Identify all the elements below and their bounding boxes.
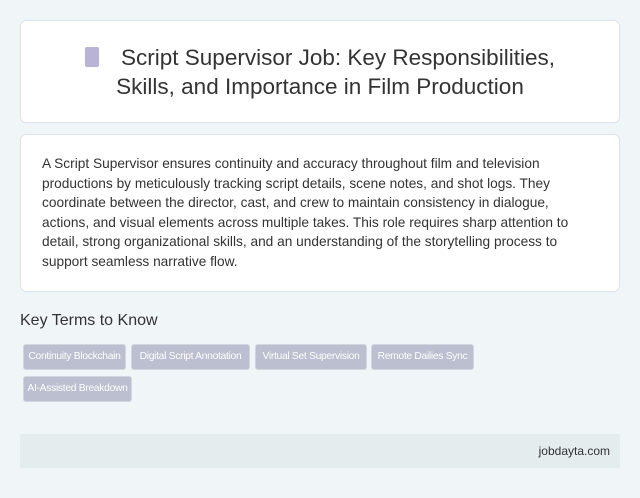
tag [255, 344, 367, 370]
title: Skills, and Importance in Film Production [116, 74, 524, 99]
description text: coordinate between the director, cast, and crew to maintain consistency in dialogue, [42, 195, 549, 210]
tag [131, 344, 250, 370]
title [85, 45, 555, 99]
description text: A Script Supervisor ensures continuity and accuracy throughout film and television [42, 156, 540, 171]
footer source: jobdayta.com [539, 444, 610, 458]
footer [20, 434, 620, 468]
tag: Continuity Blockchain [28, 351, 121, 362]
description text: productions by meticulously tracking script details, scene notes, and shot logs. They [42, 176, 550, 190]
description text: support seamless narrative flow. [42, 254, 238, 268]
tag: AI-Assisted Breakdown [27, 383, 128, 394]
tag [23, 344, 126, 370]
heading: key terms: Key Terms to Know [20, 312, 158, 329]
description card [20, 134, 620, 292]
tag: Virtual Set Supervision [262, 351, 360, 362]
tag [371, 344, 474, 370]
description text [42, 156, 568, 269]
description text: detail, strong organizational skills, and an understanding of the storytelling process to [42, 234, 557, 249]
title: Script Supervisor Job: Key Responsibilities, [121, 45, 555, 70]
description text: actions, and visual elements across multiple takes. This role requires sharp attention to [42, 214, 568, 230]
tag [23, 376, 132, 402]
header card [20, 20, 620, 123]
tag: Remote Dailies Sync [378, 351, 467, 362]
tag: Digital Script Annotation [140, 351, 241, 362]
icon: script [85, 47, 99, 67]
